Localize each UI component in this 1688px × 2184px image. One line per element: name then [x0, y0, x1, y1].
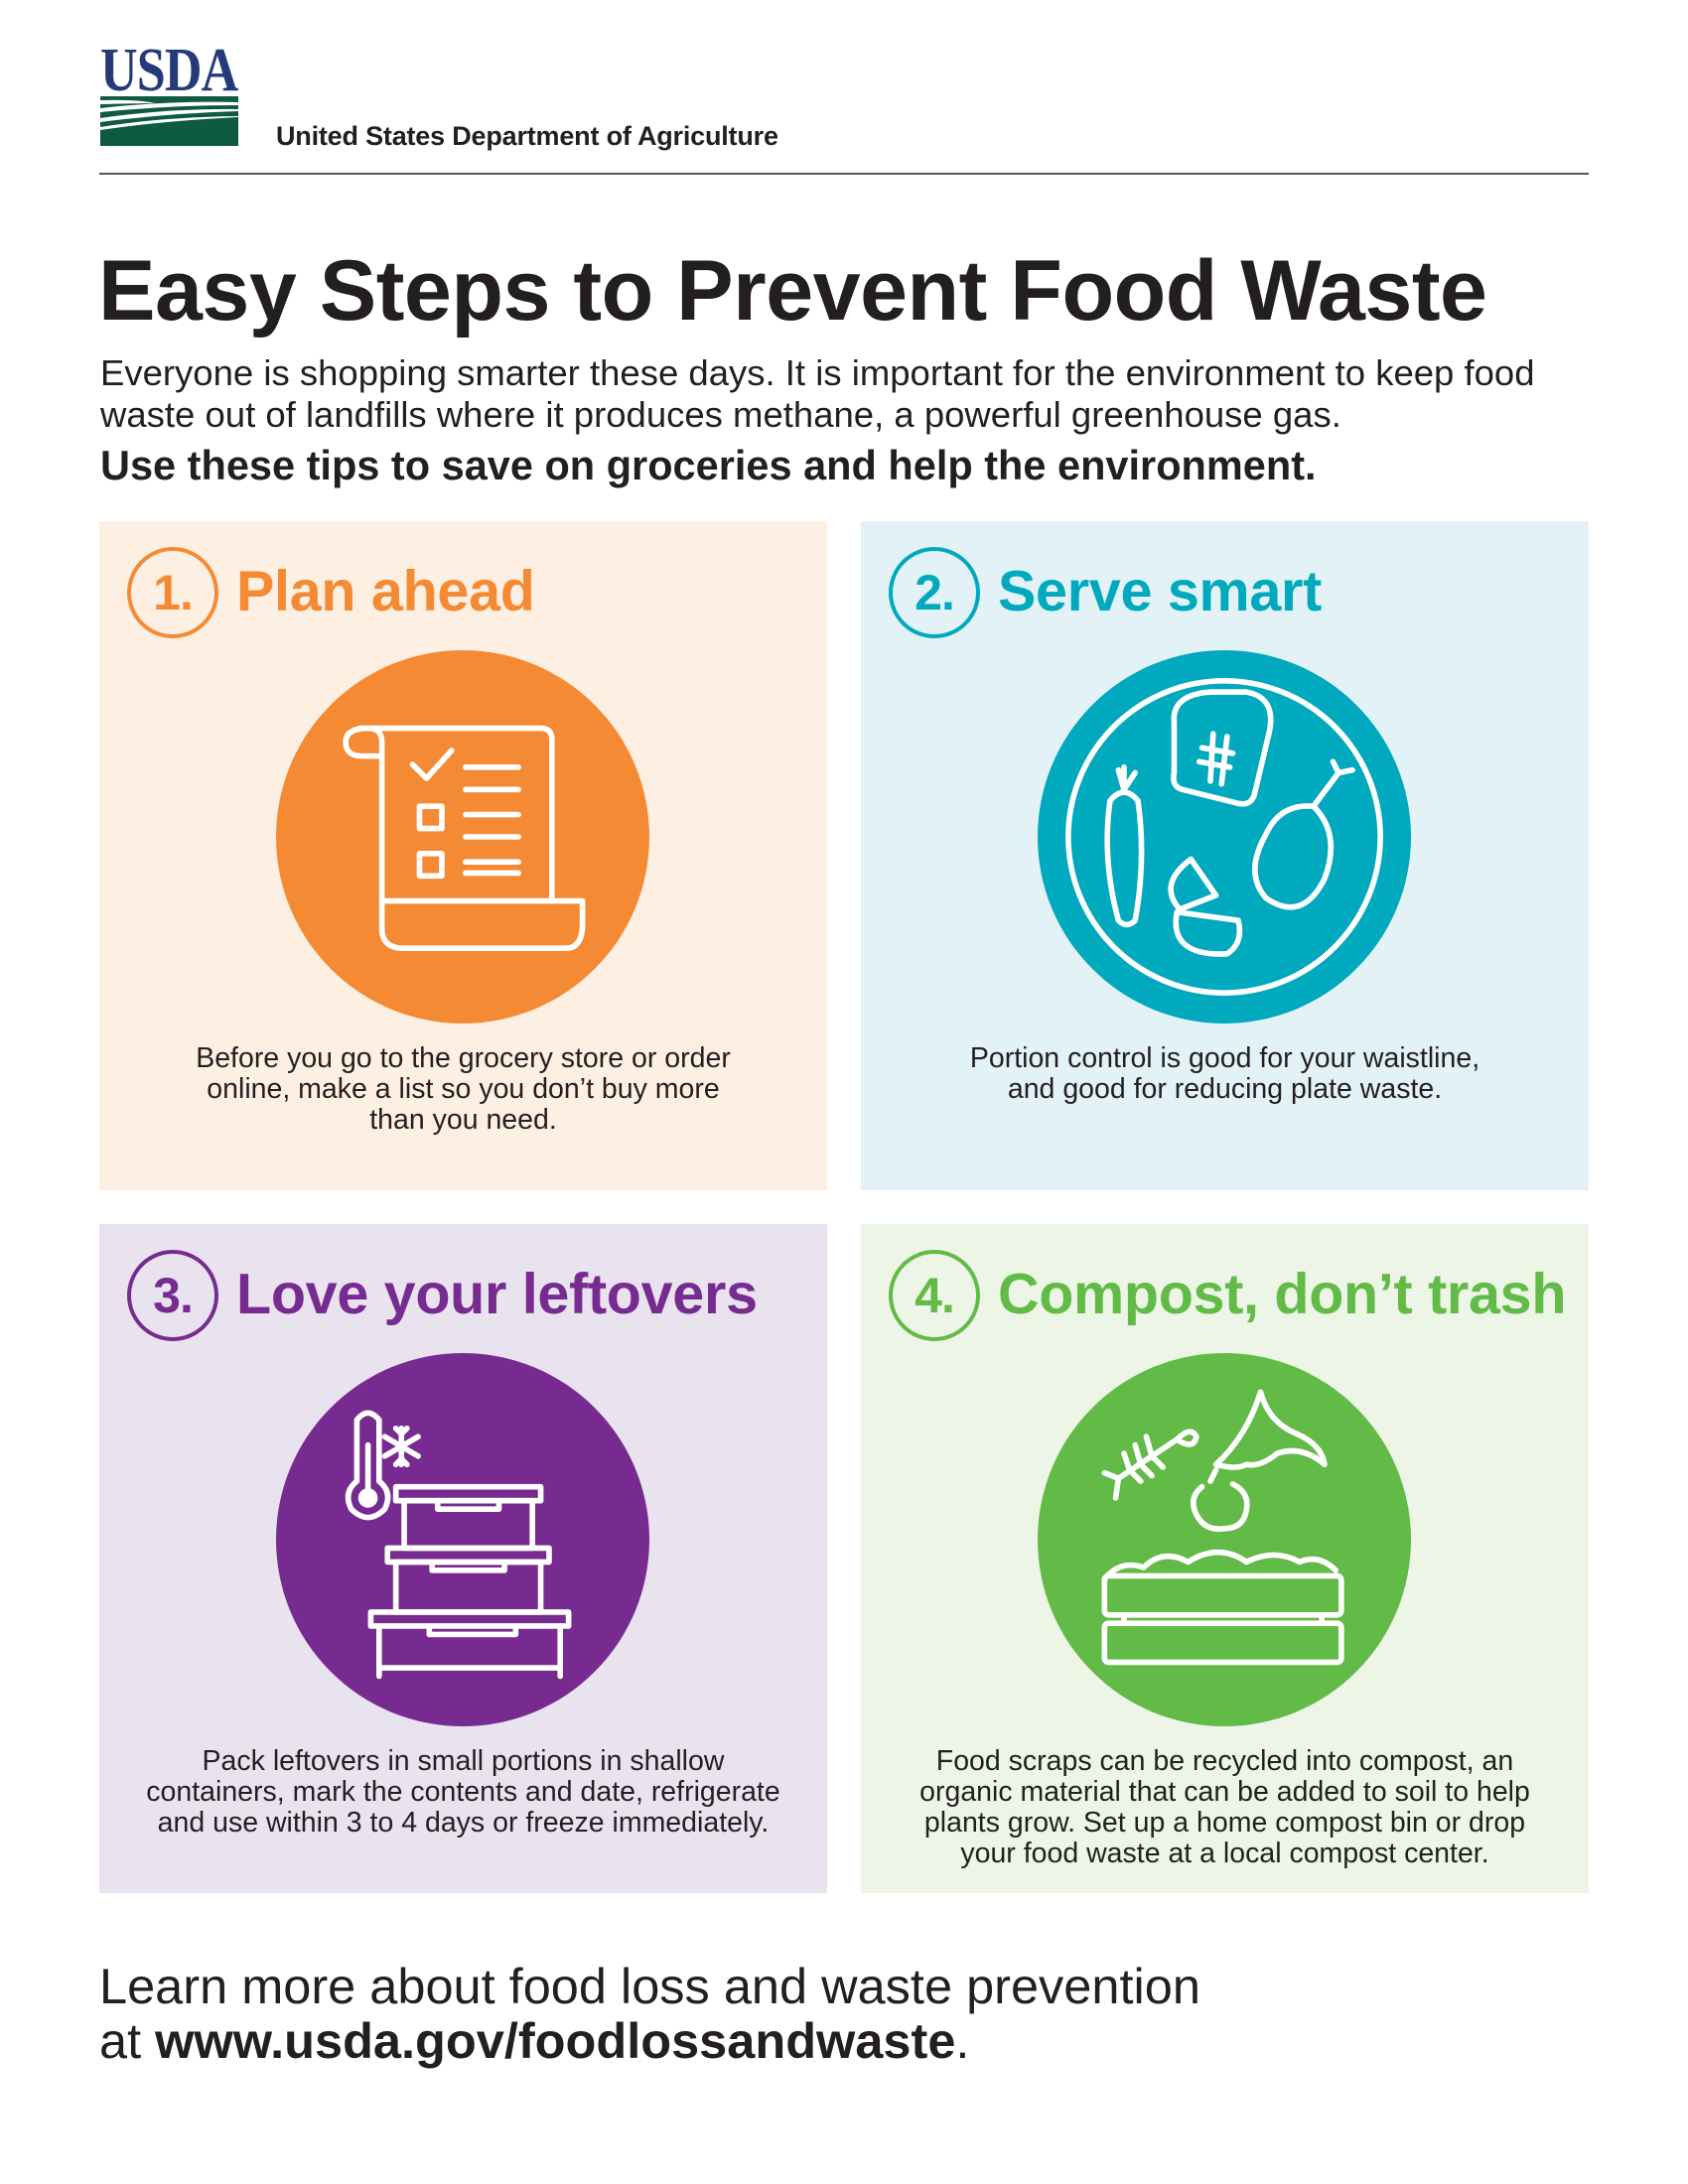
- body text: your food waste at a local compost center.: [960, 1838, 1489, 1869]
- body text: organic material that can be added to soil to help: [919, 1776, 1530, 1808]
- heading: Serve smart: [998, 560, 1322, 623]
- body text: Portion control is good for your waistline,: [970, 1042, 1479, 1074]
- intro text: waste out of landfills where it produces methane, a powerful greenhouse gas.: [100, 394, 1341, 435]
- body text: Pack leftovers in small portions in shallow: [203, 1745, 724, 1777]
- panel: compost: [861, 1224, 1589, 1893]
- number 3: 3.: [153, 1268, 193, 1323]
- body text: [146, 1745, 780, 1839]
- number 1: 1.: [153, 565, 193, 620]
- icon: shopping list: [276, 650, 649, 1024]
- heading: Compost, don’t trash: [998, 1263, 1566, 1326]
- heading: Plan ahead: [236, 560, 535, 623]
- footer: Learn more about food loss and waste prevention: [99, 1958, 1200, 2014]
- body text: than you need.: [369, 1104, 557, 1136]
- intro bold line: Use these tips to save on groceries and help the environment.: [100, 442, 1317, 488]
- number 4: 4.: [914, 1268, 954, 1323]
- icon: plate with food: [1038, 650, 1411, 1024]
- body text: and use within 3 to 4 days or freeze immediately.: [158, 1807, 769, 1839]
- panel: love your leftovers: [99, 1224, 827, 1893]
- title: Easy Steps to Prevent Food Waste: [98, 243, 1486, 339]
- body text: [919, 1745, 1530, 1869]
- body text: Before you go to the grocery store or order: [196, 1042, 731, 1074]
- panel: plan ahead: [99, 521, 827, 1190]
- body text: plants grow. Set up a home compost bin or drop: [924, 1807, 1525, 1839]
- body text: online, make a list so you don’t buy more: [207, 1073, 720, 1105]
- body text: [196, 1042, 731, 1136]
- number 2: 2.: [914, 565, 954, 620]
- number 4: [889, 1250, 980, 1341]
- icon: compost bin: [1038, 1353, 1411, 1726]
- intro text: [100, 352, 1535, 435]
- body text: [970, 1042, 1479, 1105]
- number 3: [127, 1250, 218, 1341]
- icon: containers and thermometer: [276, 1353, 649, 1726]
- panel: serve smart: [861, 521, 1589, 1190]
- body text: and good for reducing plate waste.: [1008, 1073, 1442, 1105]
- footer: at www.usda.gov/foodlossandwaste.: [99, 2012, 969, 2069]
- heading: Love your leftovers: [236, 1263, 758, 1326]
- number 2: [889, 547, 980, 638]
- agency name: United States Department of Agriculture: [276, 121, 778, 151]
- number 1: [127, 547, 218, 638]
- logo: USDA: USDA: [100, 37, 237, 104]
- footer: [99, 1958, 1200, 2069]
- body text: Food scraps can be recycled into compost, an: [936, 1745, 1513, 1777]
- body text: containers, mark the contents and date, refrigerate: [146, 1776, 780, 1808]
- intro text: Everyone is shopping smarter these days. It is important for the environment to keep food: [100, 352, 1535, 393]
- logo: USDA: [100, 37, 238, 146]
